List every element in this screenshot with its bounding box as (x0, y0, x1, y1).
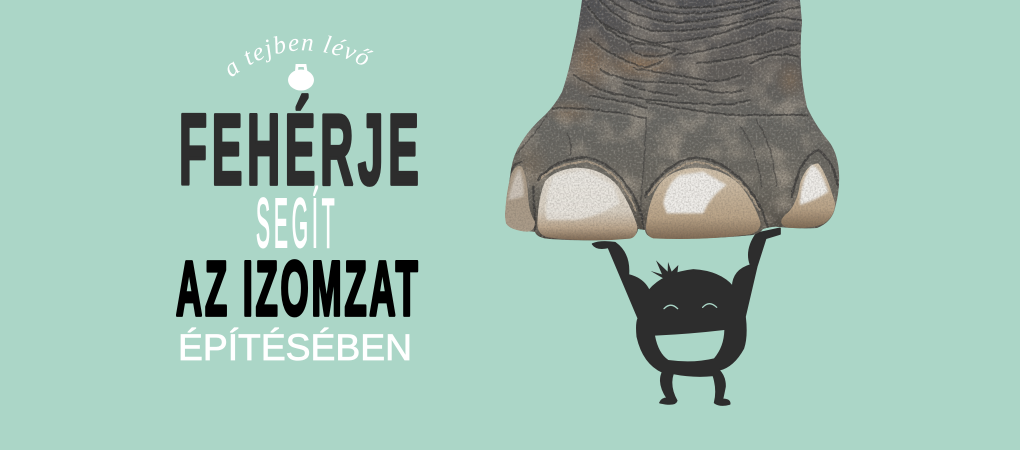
character body and arms (593, 228, 780, 405)
skin texture (500, 0, 845, 245)
outer right toenail (781, 163, 835, 228)
ÉPÍTÉSÉBEN: ÉPÍTÉSÉBEN (178, 327, 412, 368)
icon: milk jug (288, 66, 314, 90)
eyes (664, 304, 717, 309)
toenails (505, 163, 835, 240)
skin (505, 0, 839, 240)
elephant foot (500, 0, 845, 245)
white nail highlights (508, 165, 828, 220)
FEHÉRJE: FEHÉRJE (179, 95, 423, 206)
character lifting the foot (593, 228, 780, 405)
nail grain (506, 164, 835, 240)
SEGÍT: SEGÍT (256, 183, 338, 262)
AZ IZOMZAT: AZ IZOMZAT (176, 246, 421, 332)
cracks and toe creases (510, 117, 838, 230)
heading block (176, 36, 423, 368)
inner left toenail (537, 168, 637, 240)
infographic canvas (176, 0, 840, 406)
outer left toenail (505, 166, 535, 232)
small script line: a tejben lévő (228, 36, 374, 76)
inner right toenail (646, 168, 761, 239)
wrinkle highlights (553, 2, 807, 120)
wrinkle shadows (553, 0, 807, 118)
mouth (655, 330, 724, 361)
hair (651, 260, 678, 279)
